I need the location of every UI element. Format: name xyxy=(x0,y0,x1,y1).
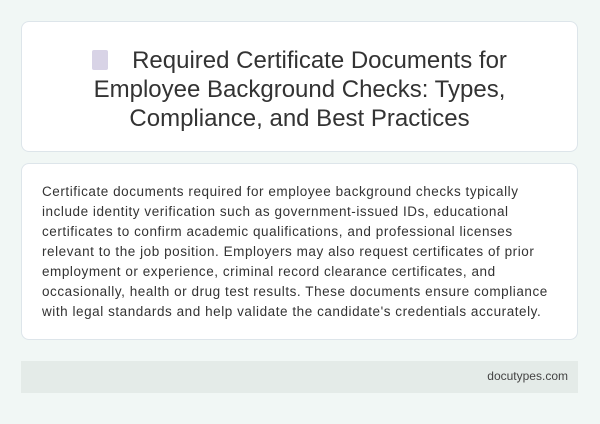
description text: include identity verification such as government-issued IDs, educational xyxy=(42,204,509,219)
description text: relevant to the job position. Employers may also request certificates of prior xyxy=(42,244,534,259)
description text: with legal standards and help validate the candidate's credentials accurately. xyxy=(42,304,541,319)
footer: docutypes.com xyxy=(487,369,568,383)
title: Employee Background Checks: Types, xyxy=(94,76,505,103)
title: Required Certificate Documents for xyxy=(132,47,507,74)
description text: Certificate documents required for employee background checks typically xyxy=(42,184,519,199)
footer xyxy=(21,361,578,393)
title xyxy=(92,47,507,132)
title: Compliance, and Best Practices xyxy=(129,105,470,132)
description text xyxy=(42,184,548,319)
title card xyxy=(21,21,578,152)
description panel xyxy=(21,163,578,340)
description text: employment or experience, criminal record clearance certificates, and xyxy=(42,264,496,279)
description text: certificates to confirm academic qualifications, and professional licenses xyxy=(42,224,513,239)
description text: occasionally, health or drug test results. These documents ensure compliance xyxy=(42,284,548,299)
icon: document xyxy=(92,50,108,70)
